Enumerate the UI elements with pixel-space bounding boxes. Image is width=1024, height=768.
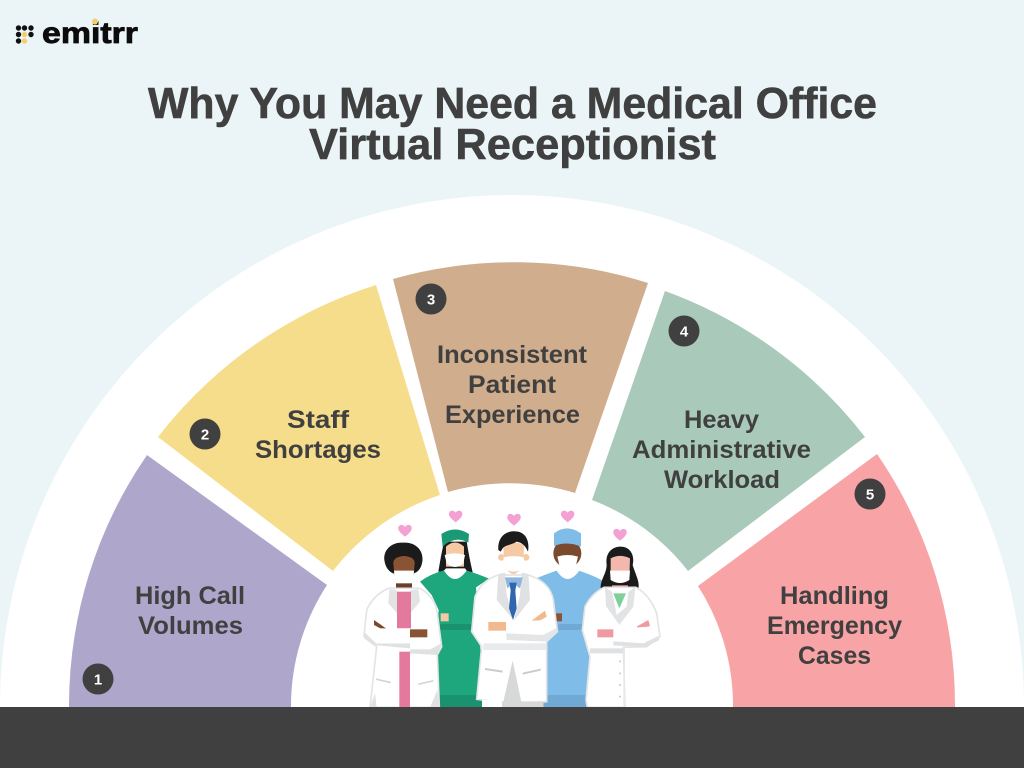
panel: 3 Inconsistent Patient Experience: Patient bbox=[468, 371, 557, 399]
panel: 4 Heavy Administrative Workload: Heavy bbox=[684, 406, 759, 434]
panel: 5 Handling Emergency Cases bbox=[698, 454, 955, 707]
panel: 5 Handling Emergency Cases: Cases bbox=[798, 642, 871, 670]
panel: 5 Handling Emergency Cases: 5 bbox=[866, 486, 874, 504]
panel: 1 High Call Volumes: Volumes bbox=[138, 612, 243, 640]
title: Virtual Receptionist bbox=[309, 120, 716, 169]
illustration: medical team bbox=[364, 511, 660, 708]
panel: 3 Inconsistent Patient Experience: 3 bbox=[427, 292, 435, 308]
panel: 1 High Call Volumes: 1 bbox=[94, 672, 102, 688]
panel: 3 Inconsistent Patient Experience: Inconsistent bbox=[437, 341, 588, 369]
figure: center doctor bbox=[472, 531, 557, 708]
icon: hearts bbox=[398, 511, 627, 541]
figure: right doctor bbox=[582, 547, 660, 707]
figure: blue nurse bbox=[536, 528, 602, 708]
panel: 3 Inconsistent Patient Experience bbox=[393, 262, 648, 493]
figure: green nurse bbox=[420, 529, 489, 708]
panel: 2 Staff Shortages: Shortages bbox=[255, 436, 381, 464]
panel: 2 Staff Shortages: Staff bbox=[287, 406, 350, 434]
logo: emitrr bbox=[16, 17, 138, 50]
panel: 4 Heavy Administrative Workload: 4 bbox=[680, 324, 689, 340]
panel: 2 Staff Shortages: 2 bbox=[201, 426, 209, 444]
panel: 4 Heavy Administrative Workload bbox=[592, 291, 865, 571]
panel: 5 Handling Emergency Cases: Emergency bbox=[767, 612, 902, 640]
panel: 2 Staff Shortages bbox=[158, 285, 440, 571]
panel: 4 Heavy Administrative Workload: Administrative bbox=[632, 436, 811, 464]
white semicircle backdrop bbox=[0, 195, 1024, 707]
title: Why You May Need a Medical Office bbox=[148, 79, 877, 128]
panel: 3 Inconsistent Patient Experience: Experience bbox=[445, 401, 580, 429]
footer band bbox=[0, 707, 1024, 768]
panel: 1 High Call Volumes bbox=[69, 455, 327, 707]
panel: 1 High Call Volumes: High Call bbox=[135, 582, 245, 610]
title bbox=[148, 79, 877, 169]
panel: 5 Handling Emergency Cases: Handling bbox=[780, 582, 889, 610]
panel: 4 Heavy Administrative Workload: Workload bbox=[664, 466, 780, 494]
logo: emitrr: emitrr bbox=[42, 17, 138, 50]
figure: left doctor bbox=[364, 543, 442, 707]
